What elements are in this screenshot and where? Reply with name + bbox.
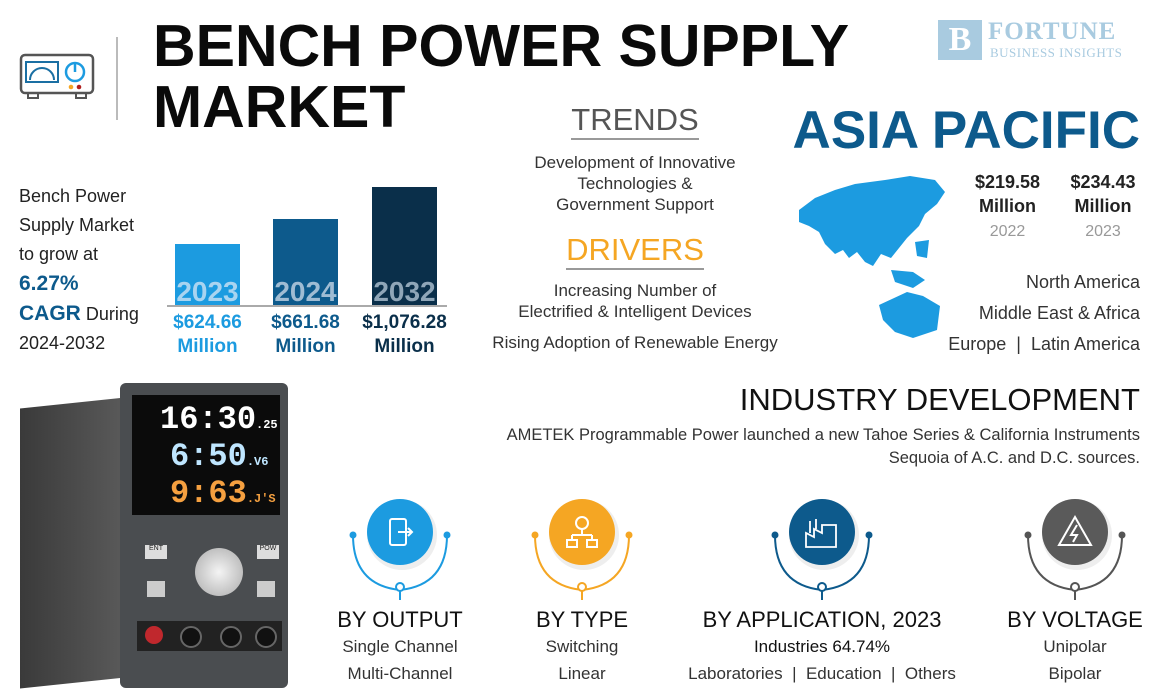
regions list: Europe | Latin America xyxy=(948,334,1140,354)
product image: power supply: 16:30.25 xyxy=(160,401,278,438)
segment: by output: Single Channel xyxy=(342,637,458,656)
CAGR text: 6.27% xyxy=(19,272,79,295)
segment: by voltage: Bipolar xyxy=(1049,664,1101,683)
trends: TRENDS xyxy=(571,102,699,137)
asia pacific values: Million xyxy=(979,196,1036,216)
segment: by application: Laboratories | Education | Others xyxy=(688,664,956,683)
bar chart: Million xyxy=(275,336,336,357)
product image: power supply: ENT xyxy=(149,545,163,552)
CAGR text: 2024-2032 xyxy=(19,333,105,353)
bar chart: $624.66 xyxy=(173,312,242,333)
segment: by output: BY OUTPUT xyxy=(337,607,463,632)
title xyxy=(153,13,849,140)
CAGR text: Bench Power xyxy=(19,186,126,206)
industry development: INDUSTRY DEVELOPMENT xyxy=(740,382,1140,417)
segment: by type: Linear xyxy=(558,664,606,683)
segment: by output: Multi-Channel xyxy=(348,664,452,683)
CAGR text: to grow at xyxy=(19,244,98,264)
regions list: Middle East & Africa xyxy=(979,303,1140,323)
text: Million xyxy=(1074,196,1132,216)
asia pacific values: 2022 xyxy=(990,223,1025,240)
title: MARKET xyxy=(153,74,405,140)
asia pacific heading: ASIA PACIFIC xyxy=(793,101,1140,160)
title: BENCH POWER SUPPLY xyxy=(153,13,849,79)
regions list: North America xyxy=(1026,272,1140,292)
segment: by application xyxy=(688,499,956,683)
asia pacific values: $219.58 xyxy=(975,172,1040,192)
segment: by output xyxy=(337,499,463,683)
bar chart: Million xyxy=(374,336,435,357)
product image: power supply: POW xyxy=(260,545,276,552)
asia pacific values xyxy=(975,172,1040,240)
segment: by application: Industries 64.74% xyxy=(754,637,890,656)
trends: Government Support xyxy=(556,195,714,214)
segment: by type: BY TYPE xyxy=(536,607,628,632)
logo: FORTUNE xyxy=(988,18,1116,45)
bar chart: $1,076.28 xyxy=(362,312,447,333)
regions list xyxy=(948,272,1140,354)
industry development: AMETEK Programmable Power launched a new Tahoe Series & California Instruments xyxy=(507,426,1140,444)
product image: power supply: 9:63.J'S xyxy=(170,475,276,512)
CAGR text: CAGR During xyxy=(19,302,139,325)
bar chart: 2024 xyxy=(274,276,337,307)
text: 2023 xyxy=(1085,223,1121,240)
logo: BUSINESS INSIGHTS xyxy=(990,45,1122,60)
drivers: Rising Adoption of Renewable Energy xyxy=(492,333,778,352)
logo xyxy=(938,18,1122,60)
trends: Technologies & xyxy=(577,174,693,193)
drivers: DRIVERS xyxy=(566,232,704,267)
segment: by type xyxy=(532,499,632,683)
trends xyxy=(534,102,736,214)
drivers: Electrified & Intelligent Devices xyxy=(518,302,752,321)
product image: power supply xyxy=(20,383,288,688)
bar chart xyxy=(167,187,447,357)
segment: by application: BY APPLICATION, 2023 xyxy=(703,607,941,632)
CAGR text: Supply Market xyxy=(19,215,134,235)
logo: B xyxy=(949,21,971,58)
icon: bench power supply xyxy=(20,54,94,99)
segment: by type: Switching xyxy=(546,637,618,656)
bar chart: 2032 xyxy=(373,276,436,307)
drivers xyxy=(492,232,778,352)
bar chart: 2023 xyxy=(176,276,239,307)
segment: by voltage xyxy=(1007,499,1143,683)
industry development: Sequoia of A.C. and D.C. sources. xyxy=(889,449,1140,467)
text: $234.43 xyxy=(1070,172,1136,192)
segment: by voltage: BY VOLTAGE xyxy=(1007,607,1143,632)
drivers: Increasing Number of xyxy=(554,281,716,300)
industry development xyxy=(506,382,1140,467)
CAGR text xyxy=(19,186,139,353)
bar chart: $661.68 xyxy=(271,312,340,333)
product image: power supply: 6:50.V6 xyxy=(170,438,268,475)
bar chart: Million xyxy=(177,336,238,357)
trends: Development of Innovative xyxy=(534,153,736,172)
segment: by voltage: Unipolar xyxy=(1043,637,1107,656)
map xyxy=(799,176,945,338)
